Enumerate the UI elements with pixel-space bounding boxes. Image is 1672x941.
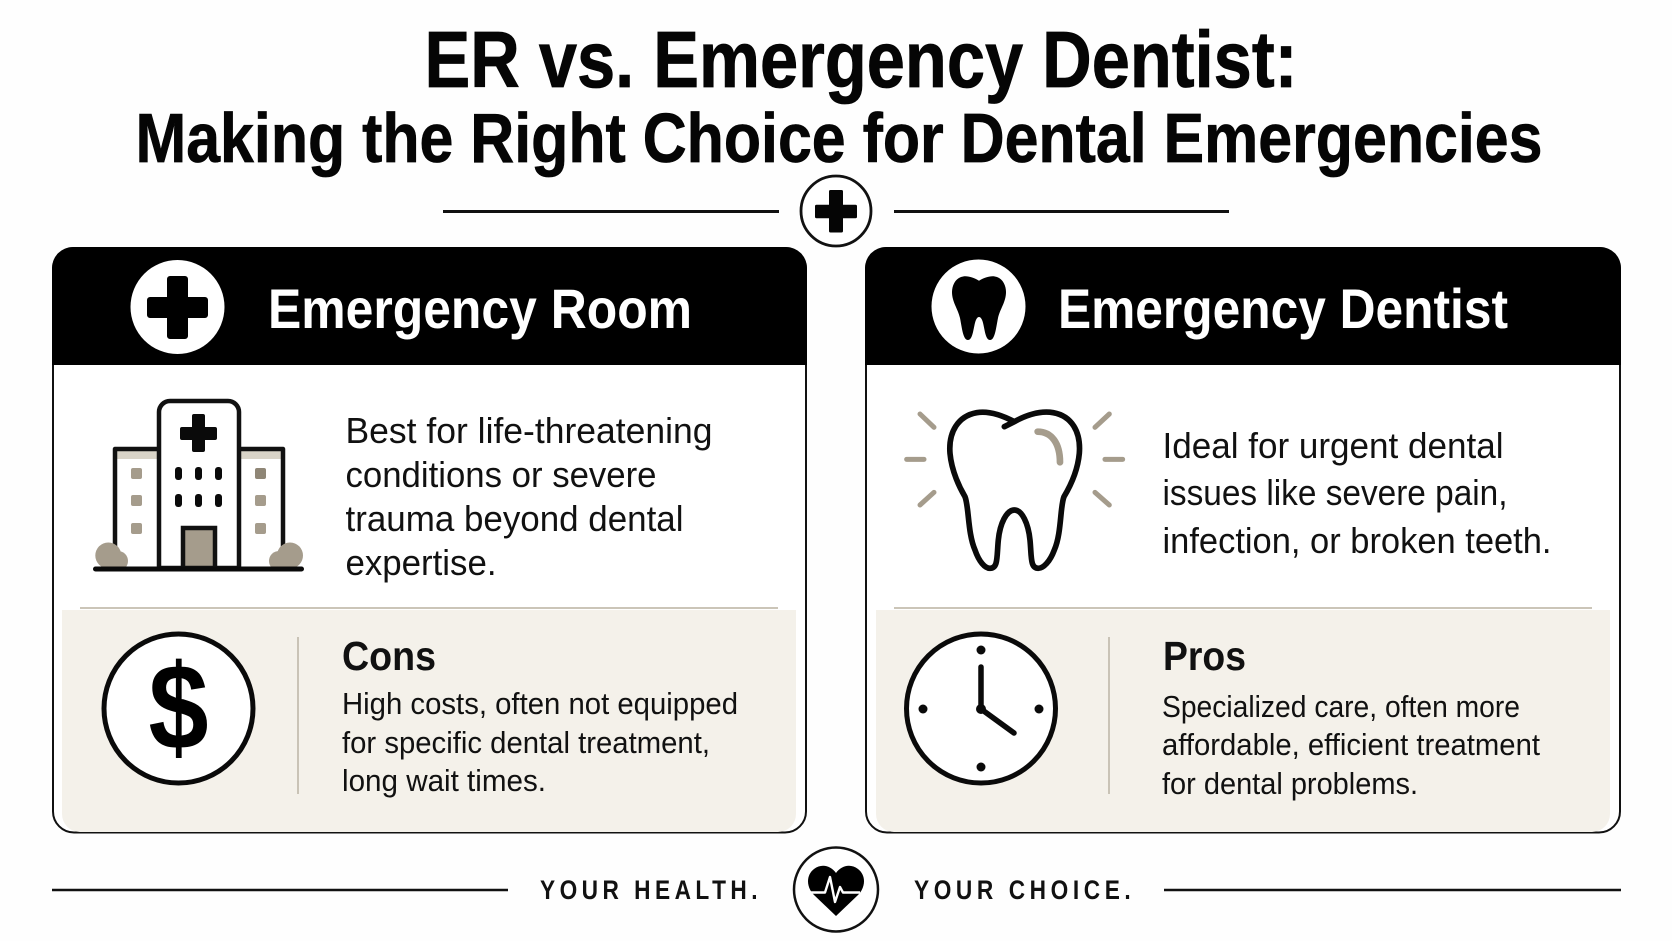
- icon: aching tooth: [907, 412, 1123, 568]
- footer tagline: YOUR CHOICE.: [914, 875, 1131, 905]
- pros panel: [876, 608, 1610, 832]
- title divider with plus icon: [443, 176, 1229, 246]
- panel header: emergency room: [52, 247, 807, 365]
- icon: heart with pulse: [794, 848, 878, 932]
- title: ER vs. Emergency Dentist:: [424, 15, 1298, 104]
- icon: plus in circle: [130, 260, 224, 354]
- text: pros list: for dental problems.: [1162, 766, 1418, 801]
- heading: emergency dentist: Emergency Dentist: [1058, 277, 1508, 340]
- icon: clock: [906, 634, 1056, 783]
- text: pros list: [1162, 689, 1540, 801]
- text: cons list: for specific dental treatment,: [342, 725, 710, 760]
- text: pros list: affordable, efficient treatment: [1162, 727, 1540, 762]
- heading: pros: Pros: [1163, 633, 1246, 679]
- text: cons list: High costs, often not equipped: [342, 686, 738, 721]
- description: emergency dentist: [1162, 425, 1552, 561]
- text: pros list: Specialized care, often more: [1162, 689, 1520, 724]
- cons panel: [62, 608, 796, 832]
- icon: hospital: [93, 401, 304, 572]
- footer tagline: YOUR HEALTH.: [540, 875, 758, 905]
- description: emergency dentist: infection, or broken teeth.: [1162, 520, 1552, 561]
- description: emergency dentist: issues like severe pain,: [1162, 472, 1508, 513]
- description: emergency room: Best for life-threatening: [346, 410, 712, 451]
- text: cons list: long wait times.: [342, 763, 546, 798]
- icon: tooth in circle: [932, 260, 1026, 354]
- description: emergency room: conditions or severe: [346, 454, 656, 495]
- title: [136, 15, 1542, 177]
- description: emergency room: trauma beyond dental: [346, 498, 684, 539]
- icon: dollar coin: [104, 634, 253, 783]
- panel header: emergency dentist: [865, 247, 1621, 365]
- description: emergency room: [346, 410, 712, 583]
- description: emergency dentist: Ideal for urgent dental: [1162, 425, 1504, 466]
- panel: emergency room: [52, 247, 807, 832]
- icon: dollar coin: $: [148, 639, 208, 775]
- heading: emergency room: Emergency Room: [268, 277, 692, 340]
- heading: cons: Cons: [342, 633, 436, 679]
- text: cons list: [342, 686, 738, 798]
- footer tagline: [52, 848, 1621, 932]
- panel: emergency dentist: [865, 247, 1621, 832]
- description: emergency room: expertise.: [346, 542, 496, 583]
